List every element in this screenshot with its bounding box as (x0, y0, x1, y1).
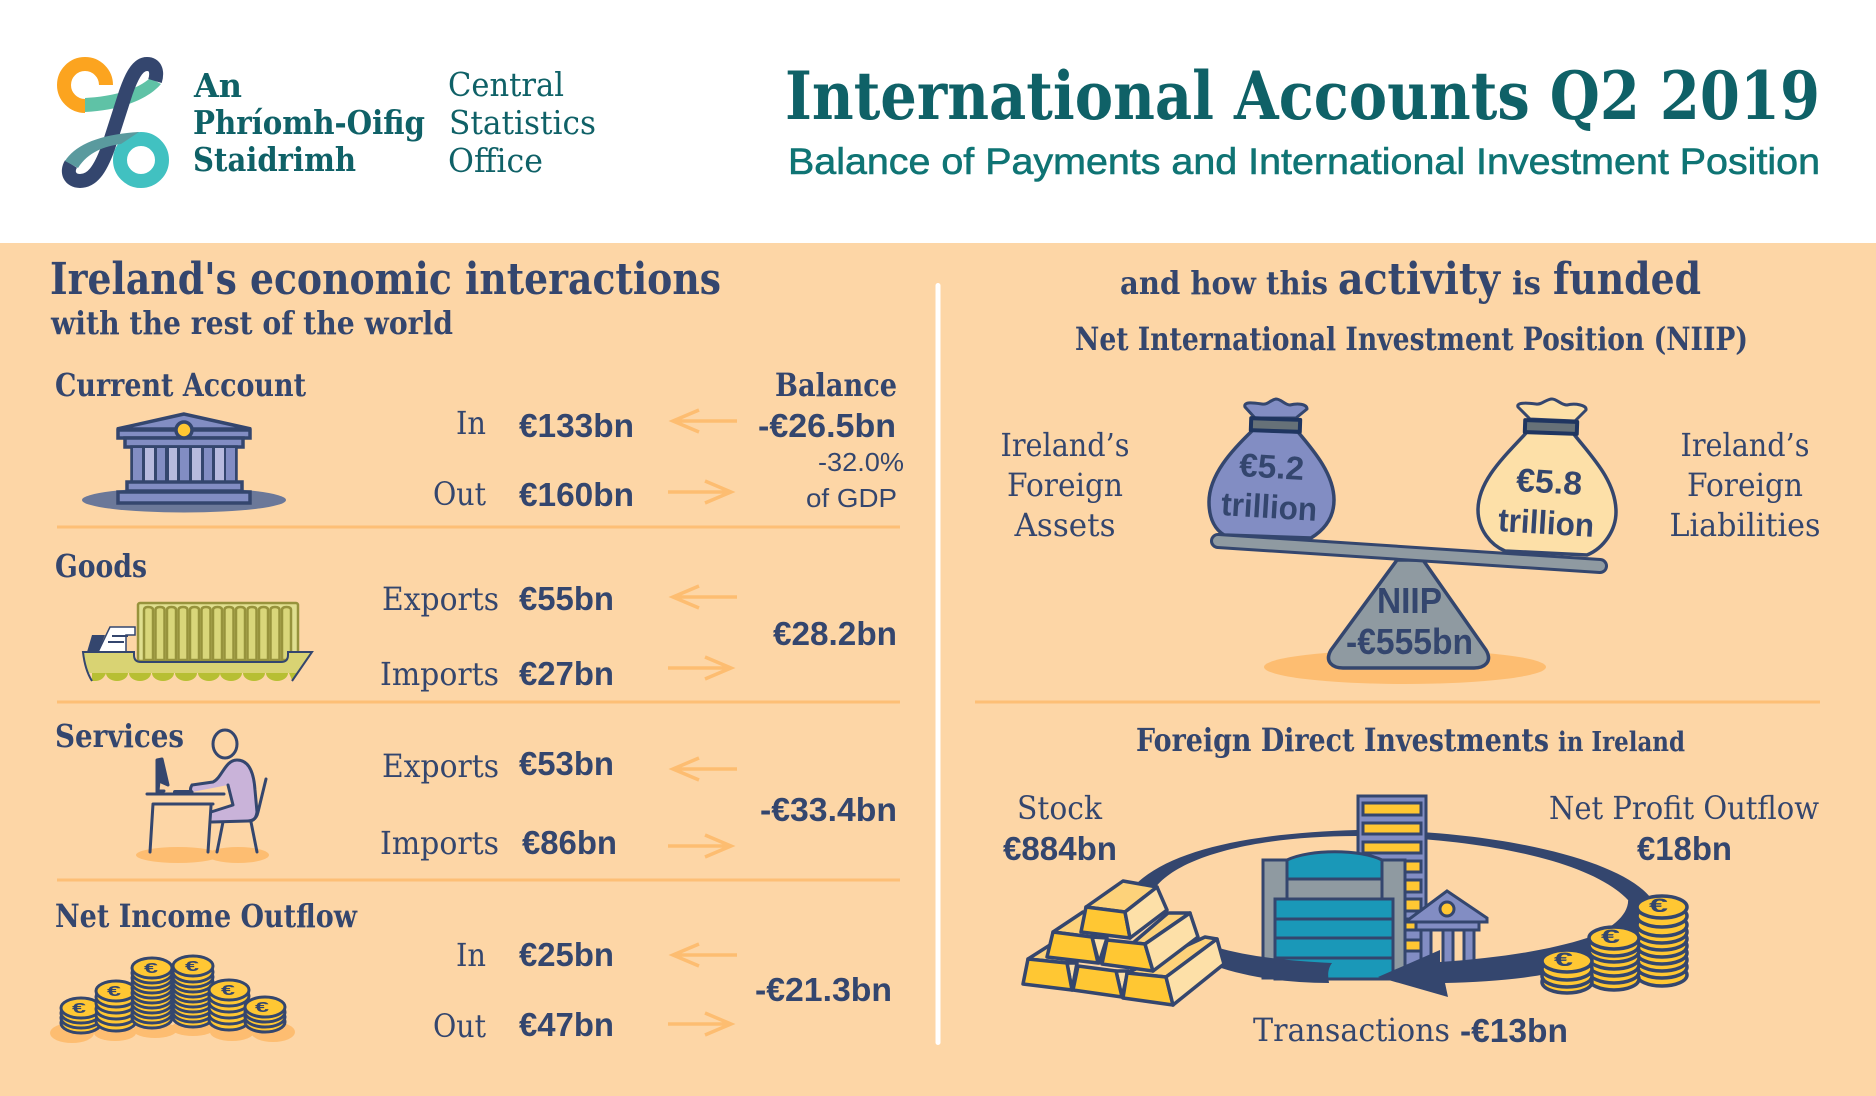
imports: €86bn (522, 824, 617, 861)
panel: economic interactions (50, 254, 904, 1045)
out (433, 1006, 614, 1045)
balance: -€26.5bn (758, 407, 896, 444)
stat: transactions: Transactions (1253, 1011, 1450, 1049)
imports (380, 824, 617, 862)
label: Goods (55, 547, 147, 585)
beam (1218, 541, 1600, 566)
heading: and how this activity is funded: funded (1553, 254, 1701, 305)
text: foreign liabilities: Liabilities (1670, 506, 1820, 544)
stat: stock: Stock (1017, 789, 1103, 827)
out: Out (433, 1007, 486, 1045)
fulcrum (1329, 560, 1488, 668)
imports (380, 655, 614, 693)
arrow: in (673, 944, 737, 966)
in: In (456, 404, 486, 442)
label: Services (55, 717, 184, 755)
subtitle: Balance of Payments and International Investment Position (788, 141, 1820, 182)
exports: Exports (382, 580, 499, 618)
logo text: English name: Statistics (449, 103, 596, 142)
header: logo (64, 64, 596, 181)
out (433, 475, 634, 513)
balance: -32.0% (818, 447, 904, 477)
arrow: lower left (1215, 947, 1332, 983)
bag: foreign assets: trillion (1220, 485, 1318, 528)
vertical divider (936, 283, 940, 1045)
exports: €53bn (519, 745, 614, 782)
icon: coin stacks: € (144, 960, 159, 977)
stat: stock (1003, 789, 1117, 867)
bag: foreign assets (1209, 399, 1334, 538)
text: foreign assets: Foreign (1007, 466, 1123, 504)
heading: NIIP: Net International Investment Position (NIIP) (1075, 320, 1748, 358)
icon: coin stacks: € (72, 1000, 87, 1017)
balance (758, 366, 904, 513)
row: goods (55, 547, 897, 693)
icon: coin stacks: € (1649, 896, 1669, 917)
heading: and how this activity is funded: is (1512, 264, 1541, 302)
text: NIIP value: -€555bn (1346, 621, 1473, 662)
stat: net profit outflow (1549, 789, 1819, 867)
icon: CSO logo mark (64, 64, 162, 181)
logo text: English name: Office (448, 141, 543, 180)
heading: and how this activity is funded: activity (1338, 254, 1501, 305)
text: NIIP value (1346, 580, 1473, 662)
subheading: with the rest of the world (50, 304, 453, 342)
row: current account (55, 366, 904, 513)
logo text: English name (448, 65, 596, 180)
stat: transactions (1253, 1011, 1568, 1049)
arrow: imports (668, 835, 731, 857)
in: €133bn (519, 407, 634, 444)
out: €47bn (519, 1006, 614, 1043)
text: foreign liabilities (1670, 426, 1820, 544)
text: foreign liabilities: Ireland’s (1680, 426, 1810, 464)
balance: Balance (775, 366, 897, 404)
icon: person at desk (136, 730, 269, 863)
arrow: imports (668, 657, 731, 679)
balance: -€33.4bn (760, 791, 897, 828)
text: foreign assets: Ireland’s (1000, 426, 1130, 464)
icon: coin stacks: € (221, 982, 236, 999)
icon: container ship (83, 603, 312, 681)
balance: -€21.3bn (755, 971, 892, 1008)
tower (1358, 796, 1426, 966)
heading: foreign direct investments: Foreign Direct Investments (1136, 721, 1549, 759)
icon: coin stacks (1542, 896, 1687, 993)
text: foreign liabilities: Foreign (1687, 466, 1803, 504)
out: €160bn (519, 476, 634, 513)
imports: €27bn (519, 655, 614, 692)
exports (382, 580, 614, 618)
row: net income outflow (50, 897, 892, 1045)
icon: gold bars (1023, 881, 1224, 1005)
arrow: exports (673, 758, 737, 780)
icon: coin stacks: € (107, 983, 122, 1000)
logo text: Irish name: An (193, 66, 242, 105)
icon: coin stacks: € (185, 958, 200, 975)
in (456, 404, 634, 444)
stat: net profit outflow: Net Profit Outflow (1549, 789, 1819, 827)
imports: Imports (380, 824, 499, 862)
logo text: English name: Central (448, 65, 564, 104)
heading: Ireland's economic interactions: Ireland's economic interactions (50, 254, 721, 305)
icon: coin stacks: € (1601, 927, 1621, 948)
heading: foreign direct investments: in Ireland (1558, 727, 1685, 758)
label: Current Account (55, 366, 306, 404)
heading: and how this activity is funded (1120, 254, 1701, 305)
arrow: exports (673, 586, 737, 608)
small bank (1408, 891, 1487, 968)
bag: foreign liabilities (1478, 399, 1616, 555)
chart: investment cycle illustration (1023, 796, 1687, 1005)
exports: €55bn (519, 580, 614, 617)
logo text: Irish name: Staidrimh (193, 140, 356, 179)
arrow: lower right (1378, 897, 1651, 997)
row: services (55, 717, 897, 863)
main building (1263, 852, 1405, 979)
exports (382, 745, 614, 785)
exports: Exports (382, 747, 499, 785)
icon: coin stacks: € (255, 999, 270, 1016)
bag: foreign liabilities: trillion (1497, 501, 1595, 544)
logo text: Irish name (193, 66, 425, 179)
bag: foreign assets: €5.2 (1238, 446, 1305, 487)
text: NIIP value: NIIP (1377, 580, 1442, 621)
arrow: in (673, 410, 737, 432)
imports: Imports (380, 655, 499, 693)
panel: how activity is funded (975, 254, 1820, 1049)
text: foreign assets: Assets (1014, 506, 1116, 544)
in (456, 936, 614, 974)
stat: transactions: -€13bn (1460, 1012, 1568, 1049)
balance: of GDP (806, 483, 897, 513)
arrow: out (668, 1013, 731, 1035)
in: In (456, 936, 486, 974)
icon: coin stacks: € (1554, 950, 1574, 971)
icon: coin stacks (50, 956, 295, 1043)
stat: stock: €884bn (1003, 830, 1117, 867)
arrow: out (668, 481, 731, 503)
balance: €28.2bn (773, 615, 897, 652)
icon: bank (82, 414, 286, 512)
stat: net profit outflow: €18bn (1637, 830, 1732, 867)
label: Net Income Outflow (55, 897, 358, 935)
in: €25bn (519, 936, 614, 973)
bag: foreign liabilities: €5.8 (1515, 461, 1583, 502)
text: foreign assets (1000, 426, 1130, 544)
heading: and how this activity is funded: and how this (1120, 264, 1328, 302)
out: Out (433, 475, 486, 513)
chart: balance scale (1209, 399, 1616, 684)
arrow: upper arc (1135, 830, 1650, 900)
logo text: Irish name: Phríomh-Oifig (193, 103, 425, 142)
